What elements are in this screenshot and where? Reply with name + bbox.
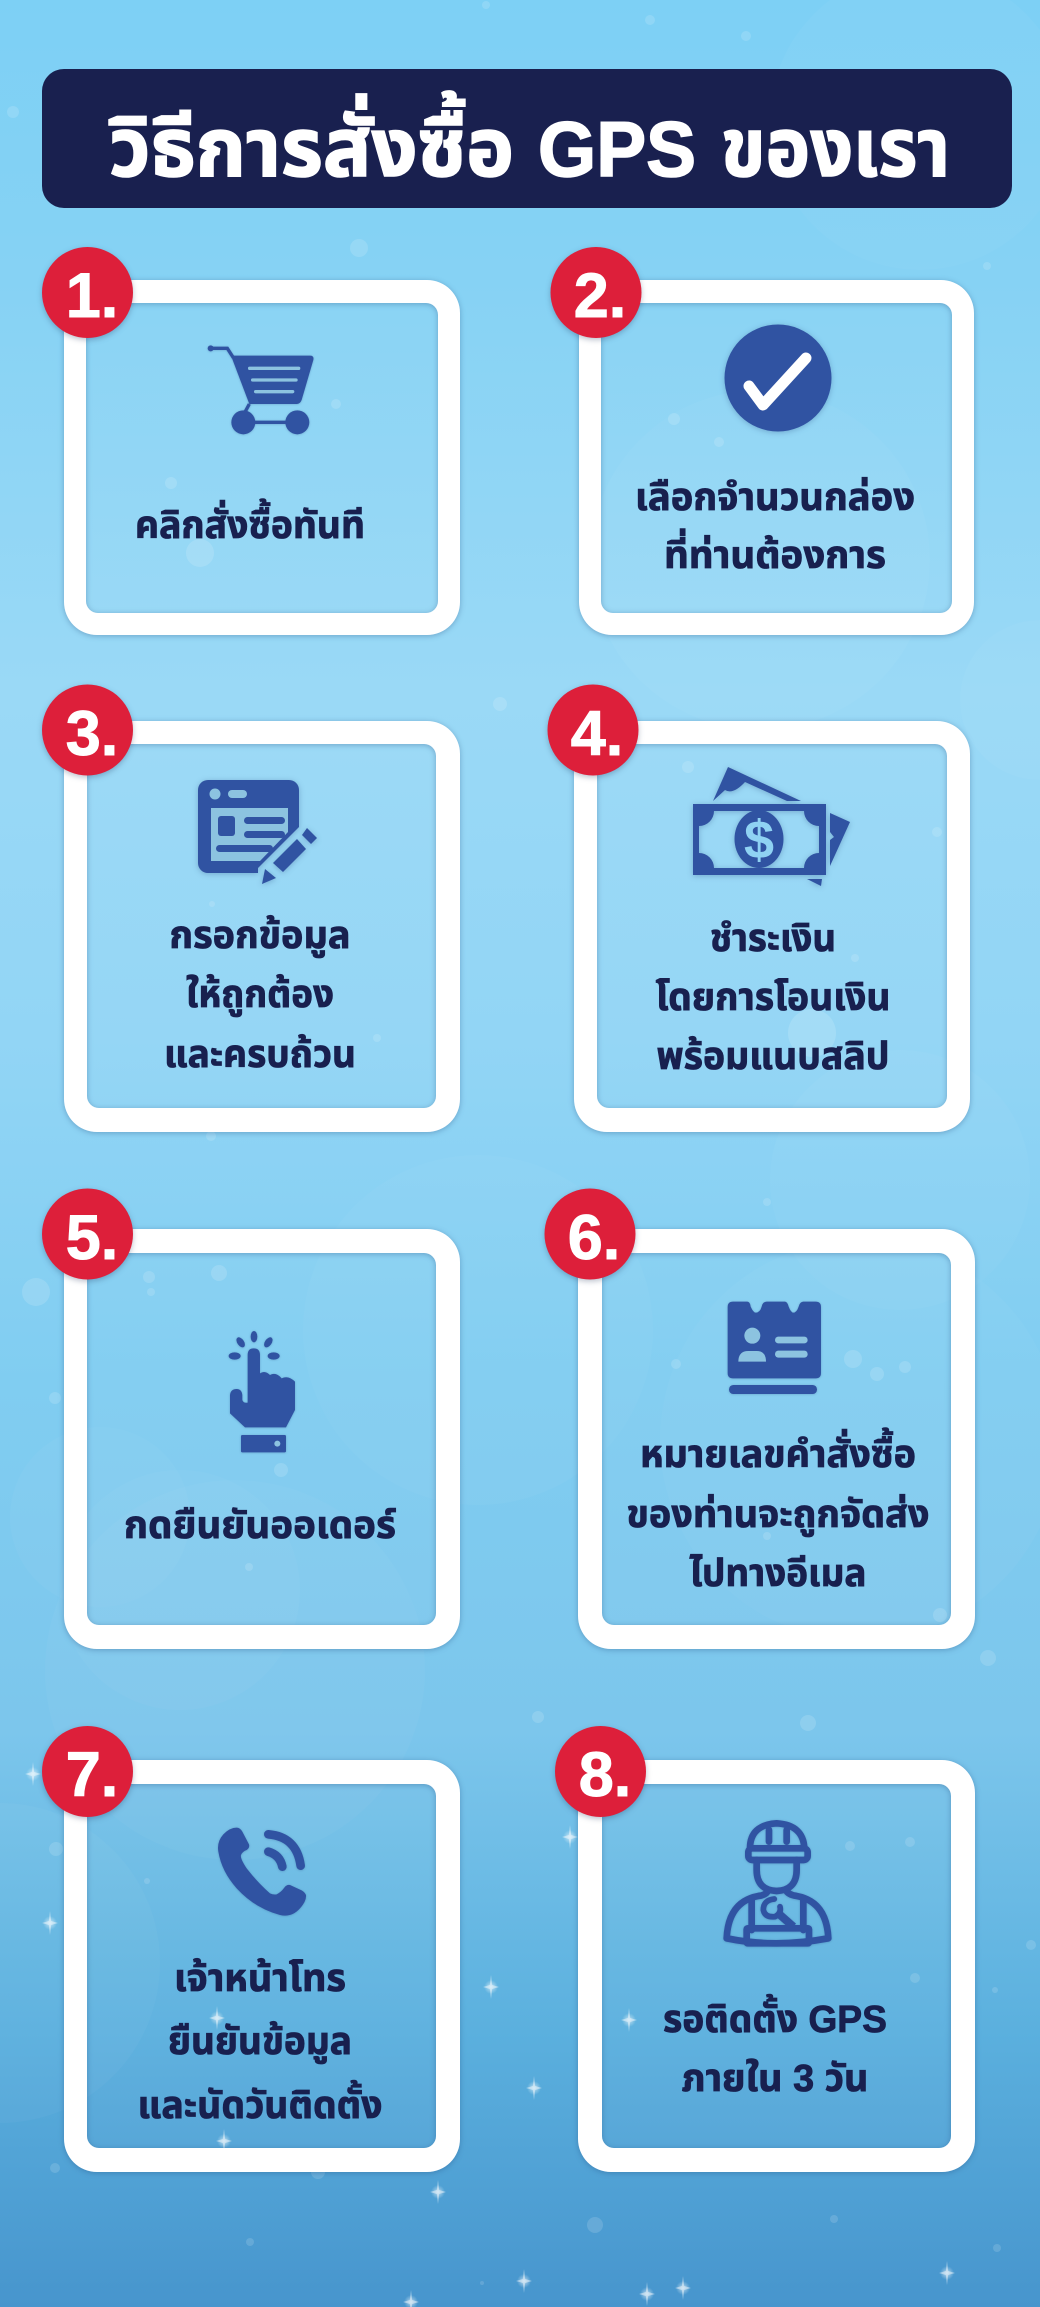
card frame 4 xyxy=(574,721,970,1132)
step 6 text: ของท่านจะถูกจัดส่ง xyxy=(626,1494,930,1537)
step 7 text: ยืนยันข้อมูล xyxy=(168,2021,352,2064)
card frame 2 xyxy=(579,280,974,635)
step 7 text xyxy=(138,1958,382,2127)
number badge 6: 6. xyxy=(568,1203,620,1273)
step 2 text: เลือกจำนวนกล่อง xyxy=(635,477,915,519)
step 8 text: รอติดตั้ง GPS xyxy=(663,1993,887,2041)
number badge 2 xyxy=(550,247,642,338)
step 4 text: พร้อมแนบสลิป xyxy=(656,1036,890,1078)
number badge 1: 1. xyxy=(66,261,118,331)
panel: step 2 choose quantity xyxy=(550,247,974,635)
step 7 text: เจ้าหน้าโทร xyxy=(174,1958,346,2000)
panel: step 7 phone call xyxy=(42,1726,460,2172)
panel: step 4 payment xyxy=(548,684,970,1132)
step 6 text xyxy=(626,1427,930,1595)
icon: pointing hand xyxy=(229,1331,295,1452)
card frame 1 xyxy=(64,280,460,635)
step 2 text xyxy=(635,477,915,577)
step 5 text: กดยืนยันออเดอร์ xyxy=(124,1505,396,1547)
icon: shopping cart xyxy=(208,345,314,434)
step 6 text: หมายเลขคำสั่งซื้อ xyxy=(640,1427,916,1476)
panel: step 3 fill details xyxy=(42,684,460,1132)
title text: ของเรา xyxy=(721,103,950,194)
number badge 6 xyxy=(544,1188,636,1280)
icon: order ticket xyxy=(728,1302,821,1394)
panel: step 5 confirm order xyxy=(42,1188,460,1649)
panel: step 8 installation xyxy=(555,1726,975,2172)
step 4 text xyxy=(656,918,890,1078)
icon: telephone xyxy=(218,1828,306,1916)
step 4 text: โดยการโอนเงิน xyxy=(656,977,890,1019)
number badge 3: 3. xyxy=(66,699,118,769)
card frame 7 xyxy=(64,1760,460,2172)
number badge 7 xyxy=(42,1726,133,1817)
panel: step 6 order number xyxy=(544,1188,975,1649)
number badge 2: 2. xyxy=(574,261,626,331)
step 8 text: ภายใน 3 วัน xyxy=(682,2058,868,2100)
panel: step 1 order xyxy=(42,247,460,635)
number badge 8: 8. xyxy=(579,1740,631,1810)
icon: check mark xyxy=(724,324,832,432)
title text xyxy=(108,90,950,194)
number badge 5 xyxy=(42,1188,133,1280)
card frame 6 xyxy=(578,1229,975,1649)
number badge 8 xyxy=(555,1726,646,1817)
card frame 3 xyxy=(64,721,460,1132)
number badge 4: 4. xyxy=(571,699,623,769)
step 3 text xyxy=(164,915,356,1076)
number badge 4 xyxy=(548,684,638,776)
title banner xyxy=(42,69,1012,208)
card frame 5 xyxy=(64,1229,460,1649)
icon: banknotes: $ xyxy=(744,810,774,870)
number badge 1 xyxy=(42,247,133,338)
step 4 text: ชำระเงิน xyxy=(710,918,836,960)
step 8 text xyxy=(663,1993,887,2100)
icon: form and pencil xyxy=(198,780,317,884)
step 3 text: ให้ถูกต้อง xyxy=(186,974,334,1017)
step 6 text: ไปทางอีเมล xyxy=(690,1553,866,1595)
card frame 8 xyxy=(578,1760,975,2172)
step 3 text: กรอกข้อมูล xyxy=(170,915,350,958)
step 2 text: ที่ท่านต้องการ xyxy=(664,528,886,577)
step 3 text: และครบถ้วน xyxy=(164,1034,356,1076)
title text: วิธีการสั่งซื้อ xyxy=(108,90,514,194)
number badge 5: 5. xyxy=(66,1203,118,1273)
icon: technician xyxy=(727,1823,828,1943)
number badge 7: 7. xyxy=(66,1740,118,1810)
number badge 3 xyxy=(42,684,133,776)
title text: GPS xyxy=(538,105,696,193)
icon: banknotes xyxy=(693,767,850,886)
step 7 text: และนัดวันติดตั้ง xyxy=(138,2079,382,2127)
step 1 text: คลิกสั่งซื้อทันที xyxy=(135,498,365,547)
